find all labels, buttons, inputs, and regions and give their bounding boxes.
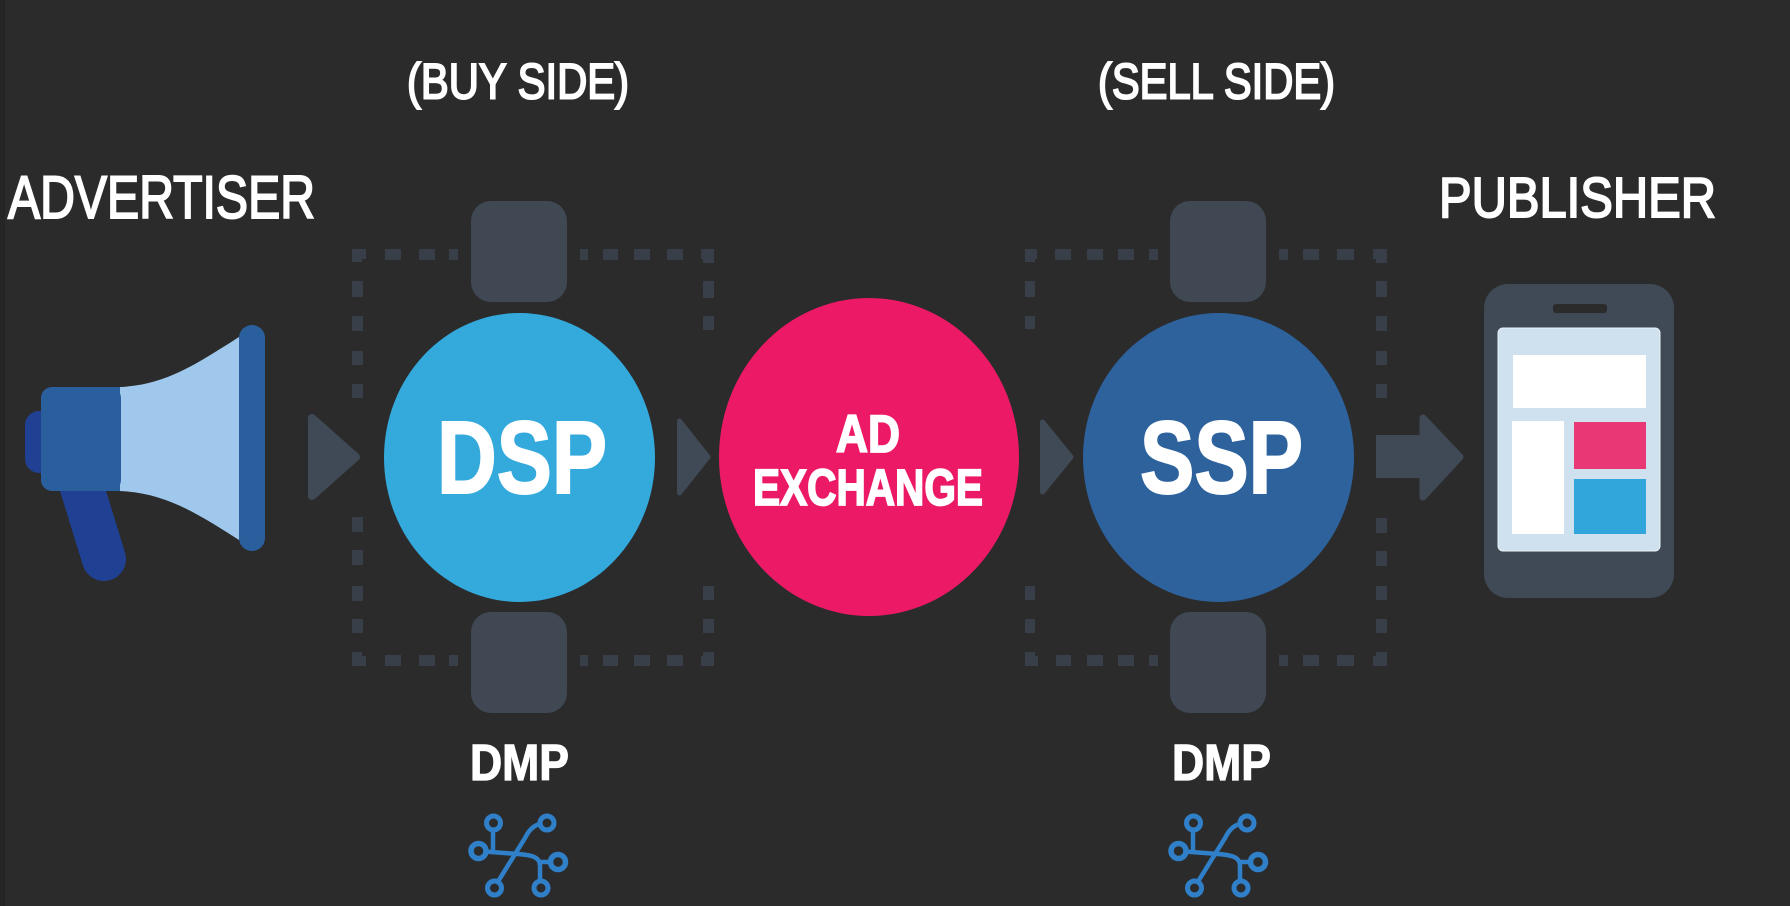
node: DSP bbox=[384, 313, 655, 602]
sell side top square bbox=[1170, 201, 1266, 302]
node: DSP: DSP bbox=[437, 400, 607, 515]
icon: phone with ad layout bbox=[1484, 284, 1674, 598]
dashed box: sell side bbox=[1025, 249, 1387, 666]
node: ad exchange: EXCHANGE bbox=[753, 459, 983, 516]
buy side top square bbox=[471, 201, 567, 302]
arrow: advertiser to DSP bbox=[312, 418, 356, 496]
node: ad exchange: AD bbox=[836, 405, 900, 464]
icon: megaphone bbox=[25, 325, 265, 559]
node: ad exchange bbox=[719, 298, 1019, 616]
arrow: SSP to publisher bbox=[1376, 418, 1460, 497]
arrow: ad exchange to SSP bbox=[1042, 422, 1071, 492]
label: buy side DMP: DMP bbox=[470, 734, 569, 791]
arrow: DSP to ad exchange bbox=[680, 421, 708, 493]
icon: buy side DMP network bbox=[471, 816, 566, 895]
heading: publisher: PUBLISHER bbox=[1439, 166, 1716, 230]
node: SSP: SSP bbox=[1140, 400, 1303, 515]
label: sell side DMP: DMP bbox=[1172, 734, 1271, 791]
sell side bottom square bbox=[1170, 612, 1266, 713]
node: SSP bbox=[1083, 313, 1354, 602]
icon: sell side DMP network bbox=[1171, 816, 1266, 895]
heading: sell side: (SELL SIDE) bbox=[1098, 54, 1335, 110]
heading: advertiser: ADVERTISER bbox=[8, 164, 315, 231]
buy side bottom square bbox=[471, 612, 567, 713]
heading: buy side: (BUY SIDE) bbox=[407, 54, 629, 110]
dashed box: buy side bbox=[352, 249, 714, 666]
